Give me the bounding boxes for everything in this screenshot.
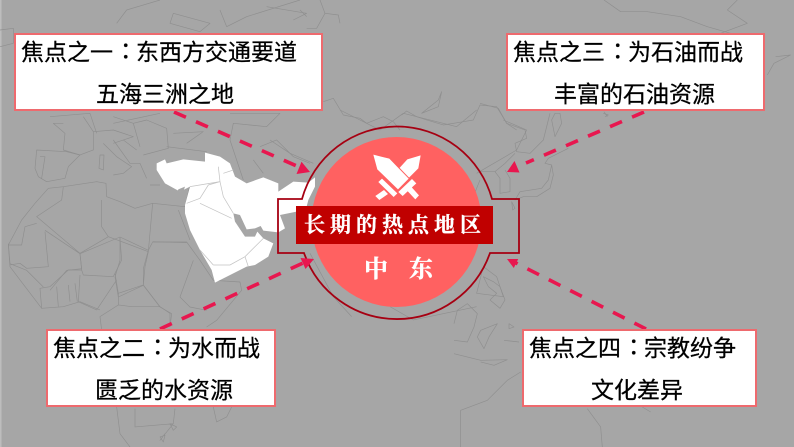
callout: focus three: 丰富的石油资源 [554, 81, 715, 107]
callout: focus one: 五海三洲之地 [96, 81, 234, 107]
callout: focus two [46, 329, 276, 407]
callout: focus two: 焦点之二 为水而战 [53, 335, 260, 361]
callout: focus one [14, 33, 323, 111]
callout: focus two: 匮乏的水资源 [95, 377, 233, 403]
callout: focus one: ： [120, 37, 143, 63]
callout: focus three: 焦点之三 为石油而战 [513, 39, 743, 65]
callout: focus four: ： [628, 333, 651, 359]
subtitle: 中东: 中东 [364, 257, 454, 283]
callout: focus four: 焦点之四 宗教纷争 [529, 335, 736, 361]
callout: focus two: ： [152, 333, 175, 359]
callout: focus four: 文化差异 [591, 377, 683, 403]
callout: focus three [506, 33, 765, 111]
callout: focus three: ： [612, 37, 635, 63]
callout: focus four [522, 329, 757, 407]
banner: 长期的热点地区 [296, 206, 493, 244]
banner: 长期的热点地区: 长期的热点地区 [304, 213, 486, 237]
callout: focus one: 焦点之一 东西方交通要道 [21, 39, 297, 65]
